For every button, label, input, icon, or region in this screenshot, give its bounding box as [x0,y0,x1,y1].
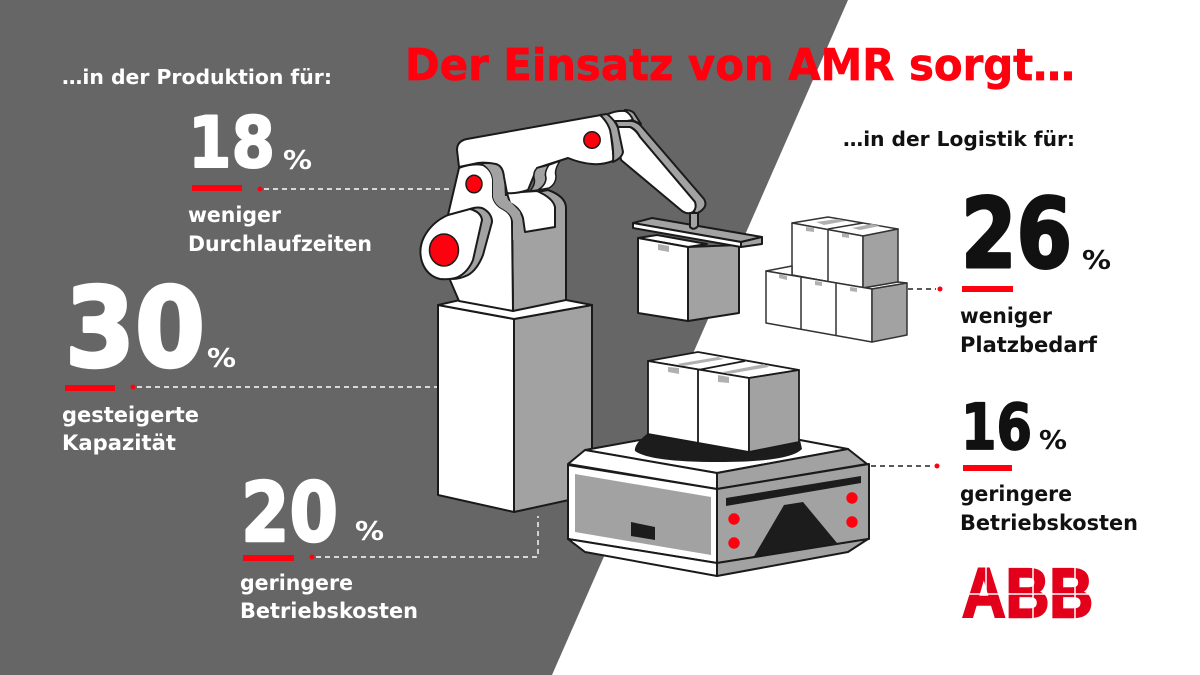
connector [258,186,452,192]
stat: 16 percent [871,391,1138,535]
heading: production: …in der Produktion für: [62,65,332,89]
value: 30 [65,264,205,392]
percent sign: % [283,146,312,176]
stacked boxes [766,217,907,342]
bevel faces [568,449,867,489]
description: Kapazität [62,431,176,455]
upper arm [457,114,623,193]
value: 18 [188,102,275,184]
lower row of boxes [766,266,907,342]
stat: 30 percent [62,264,437,455]
description: weniger [960,304,1053,328]
robot arm on pedestal [420,110,762,512]
value: 26 [961,178,1072,290]
bottom bevel [568,539,868,576]
boxes on AMR [648,352,799,452]
robot arm base [448,164,566,311]
value: 16 [961,391,1032,464]
description: geringere [240,571,353,595]
pedestal [438,300,592,512]
upper row of boxes [792,217,898,288]
panel: dark diagonal background [0,0,848,675]
description: geringere [960,482,1072,506]
shoulder disc [420,208,492,279]
stat: 18 percent [188,102,452,256]
description: gesteigerte [62,403,199,427]
forearm [606,110,706,214]
ABB logo: ABB [962,554,1093,632]
accent bar [243,555,294,561]
connector [908,286,942,292]
stat: 26 percent [908,178,1111,357]
accent bar [192,185,242,191]
turntable [635,433,802,462]
connector [871,464,940,468]
heading: logistics: …in der Logistik für: [843,127,1075,151]
percent sign: % [1039,426,1067,456]
accent bar [962,286,1013,292]
joint: shoulder marker [430,234,458,266]
accent bar [65,385,115,391]
description: weniger [188,203,282,227]
carried box [638,235,739,321]
joint: upper arm marker [584,132,600,148]
description: Betriebskosten [960,511,1138,535]
description: Platzbedarf [960,333,1098,357]
value: 20 [241,466,338,561]
accent bar [963,465,1012,471]
left side panel [568,465,717,563]
percent sign: % [1082,246,1111,276]
percent sign: % [355,517,384,547]
description: Durchlaufzeiten [188,232,372,256]
AMR top plate [585,440,848,473]
AMR mobile robot [568,352,869,576]
right side panel [717,464,869,563]
plate [633,218,762,247]
end effector stem [690,213,698,229]
stat: 20 percent [240,466,538,623]
description: Betriebskosten [240,599,418,623]
joint: base marker [466,175,482,193]
title: Der Einsatz von AMR sorgt… [405,40,1075,91]
gripper plate with carried box [633,213,762,321]
connector [310,516,538,560]
percent sign: % [207,344,236,374]
connector [130,384,437,390]
